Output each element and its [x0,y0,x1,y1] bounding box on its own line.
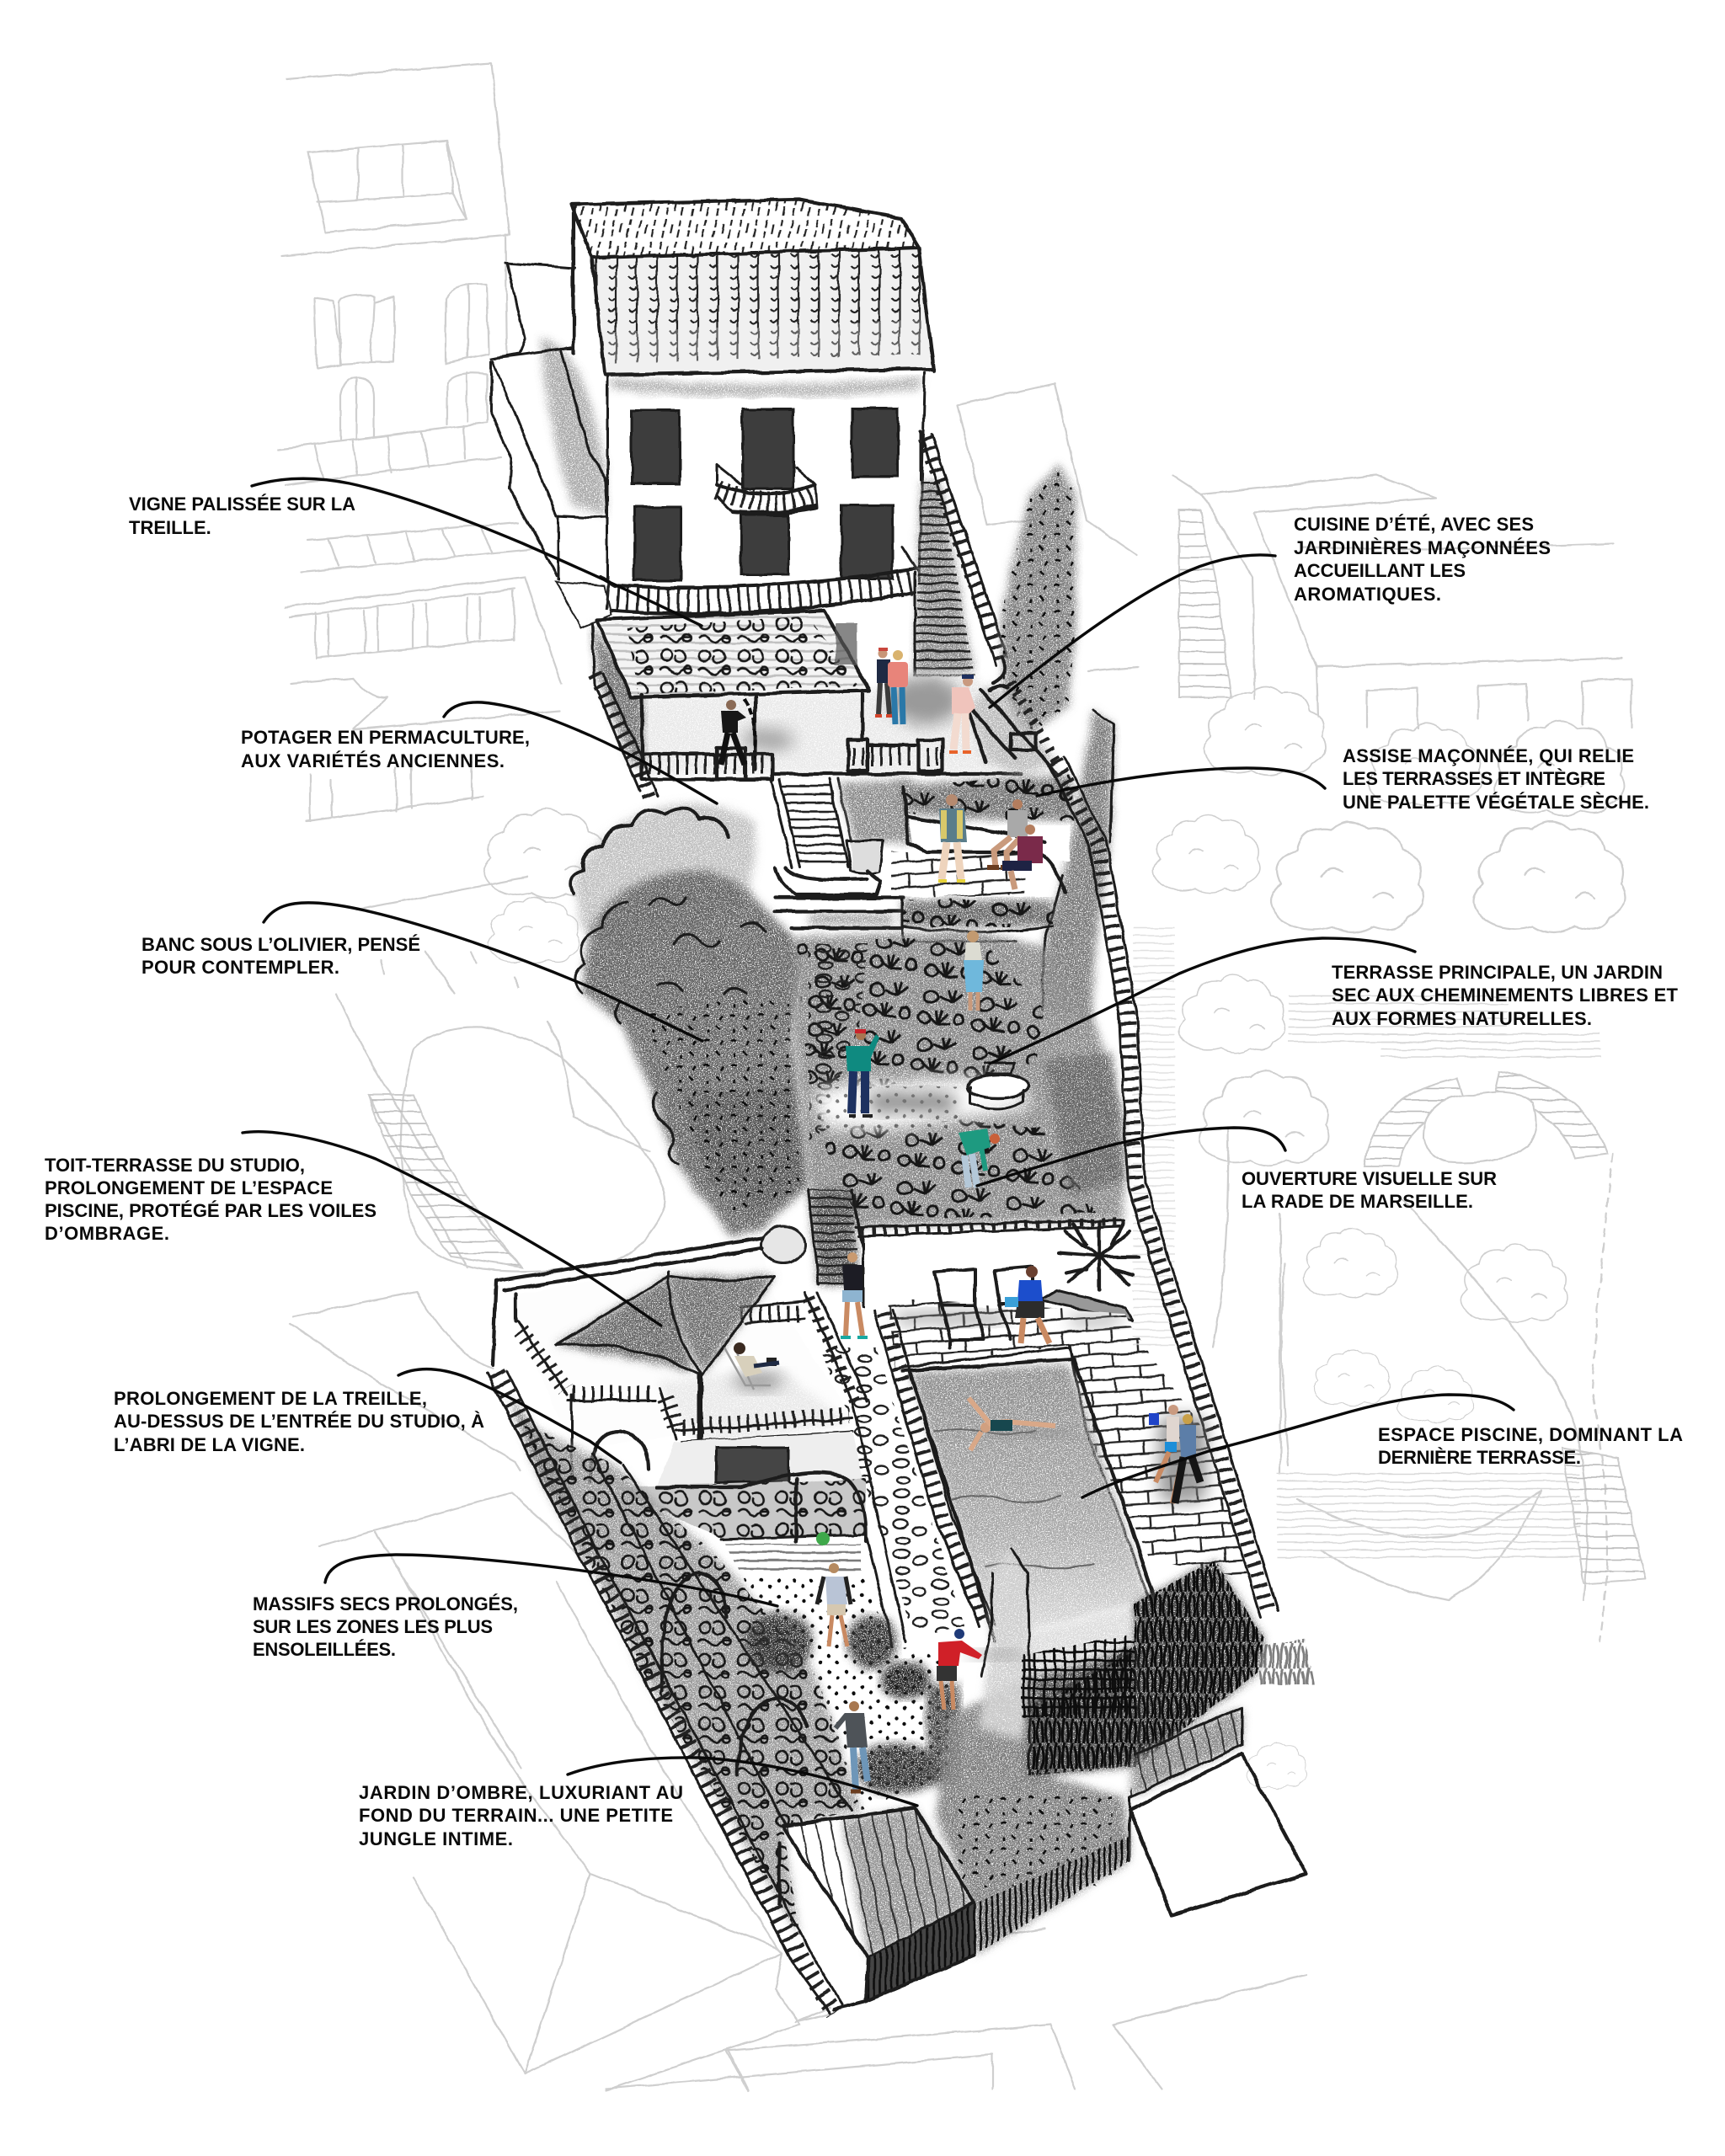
studio front and window [508,1396,863,1565]
people: couple on the pool deck [1149,1405,1207,1503]
callout: massifs secs: SUR LES ZONES LES PLUS [253,1616,493,1637]
house roof [571,200,934,375]
swimming pool [903,1359,1156,1676]
people: woman with camera and shorts [841,1252,868,1337]
callout: ouverture visuelle: LA RADE DE MARSEILLE. [1242,1191,1473,1212]
callout: massifs secs [253,1555,777,1660]
sun loungers [934,1267,1033,1348]
small cypress near pool [979,1548,1030,1741]
upper left building [278,63,562,910]
callout: ouverture visuelle: OUVERTURE VISUELLE SUR [1242,1168,1497,1189]
callout: assise maçonnée: LES TERRASSES ET INTÈGRE [1343,768,1605,789]
people: man in black under pergola [721,700,746,765]
ornamental grasses [1022,1561,1314,1775]
callout: espace piscine [1082,1395,1683,1497]
callout: prolongement de la treille: AU-DESSUS DE L’ENTRÉE DU STUDIO, À [114,1411,484,1432]
curved steps and planter [775,867,1053,942]
callout: toit-terrasse: PISCINE, PROTÉGÉ PAR LES VOILES [45,1200,377,1221]
callout: assise maçonnée [1037,745,1649,813]
main site white base [491,200,1272,2013]
lower right enclosure [1130,1754,1306,1915]
masonry seat and planter [900,775,1074,893]
paved terrace [891,851,1028,898]
callout: cuisine d'été: AROMATIQUES. [1294,584,1441,605]
callout: vigne palissée: TREILLE. [129,517,211,538]
people: person with laptop on deck chair [724,1342,783,1390]
callout: terrasse principale: SEC AUX CHEMINEMENTS LIBRES ET [1332,985,1679,1006]
callout: prolongement de la treille: PROLONGEMENT DE LA TREILLE, [114,1388,427,1409]
callout: espace piscine: ESPACE PISCINE, DOMINANT LA [1378,1424,1683,1445]
people: person bending in green [959,1129,1000,1187]
callout: prolongement de la treille [114,1369,621,1463]
shed roof [779,1807,974,1958]
people: swimmer [969,1398,1070,1450]
callout: jardin d'ombre: FOND DU TERRAIN... UNE PETITE [359,1805,673,1826]
pool deck [887,1298,1247,1600]
people: man in red [937,1629,1019,1710]
studio railings [517,1301,852,1478]
cypress tree [1001,465,1076,740]
main balcony railing [556,547,919,627]
left side trees and pond [337,808,665,1272]
people: woman in pink [888,650,908,724]
callout: terrasse principale: TERRASSE PRINCIPALE, UN JARDIN [1332,962,1663,983]
context arch path [1365,1071,1607,1166]
people: man cooking in pink shirt [949,675,975,752]
stairs to pool terrace [761,1190,866,1284]
callout: massifs secs: MASSIFS SECS PROLONGÉS, [253,1593,518,1614]
shrubs in courtyard [745,1612,960,1794]
terrace railings [642,739,1022,779]
callout: jardin d'ombre: JARDIN D’OMBRE, LUXURIANT AU [359,1782,683,1803]
callout: toit-terrasse [45,1132,661,1326]
exterior staircase [915,430,1007,675]
callout: potager: AUX VARIÉTÉS ANCIENNES. [241,750,505,771]
callout: potager [241,702,717,803]
house facade [607,372,925,581]
second cypress tree [1042,710,1114,1022]
callout: banc sous l'olivier: BANC SOUS L’OLIVIER, PENSÉ [142,934,420,955]
people: boy with green ball [816,1532,851,1646]
palm plant [1040,1221,1140,1321]
upper terrace ground [592,624,1056,800]
callout: prolongement de la treille: L’ABRI DE LA VIGNE. [114,1434,305,1455]
callout: cuisine d'été: ACCUEILLANT LES [1294,560,1466,581]
shade sails [556,1272,775,1439]
summer kitchen [966,657,1057,775]
lower garden wall [974,1707,1242,1956]
paved path and pool wall [805,1293,996,1642]
lawn and gravel courtyard [721,1534,958,1810]
lower staircase from upper terrace [771,779,857,867]
callout: toit-terrasse: PROLONGEMENT DE L’ESPACE [45,1177,333,1198]
outer left wall [487,1371,842,2013]
callout: vigne palissée: VIGNE PALISSÉE SUR LA [129,494,355,515]
context water hatching lower right [1277,994,1646,1583]
small balcony [717,465,817,515]
callout: potager: POTAGER EN PERMACULTURE, [241,727,530,748]
windows [632,408,898,580]
callout: vigne palissée [129,478,702,626]
left annex of the house [491,263,607,579]
main dry garden [793,931,1124,1227]
right side trees [1153,686,1626,1788]
people: bearded man in sweater [836,1701,868,1791]
road band left [368,1095,522,1267]
callout: banc sous l'olivier: POUR CONTEMPLER. [142,957,339,978]
callout: banc sous l'olivier [142,903,702,1041]
callout: jardin d'ombre: JUNGLE INTIME. [359,1828,513,1849]
pot and shrub beside stairs [839,779,927,873]
callout: cuisine d'été: CUISINE D’ÉTÉ, AVEC SES [1294,514,1534,535]
shade garden [915,1676,1130,1908]
people: woman seated in blue top [1005,1266,1049,1343]
callout: massifs secs: ENSOLEILLÉES. [253,1639,396,1660]
outer right wall [1049,758,1278,1617]
upper right buildings [958,383,1632,728]
studio roof terrace [493,1238,851,1449]
callout: cuisine d'été: JARDINIÈRES MAÇONNÉES [1294,537,1551,558]
people: man in teal with red cap [846,1029,879,1116]
upper shrub [570,803,756,952]
people: woman in blue skirt with hat [964,931,984,1011]
callout: assise maçonnée: ASSISE MAÇONNÉE, QUI RELIE [1343,745,1634,766]
callout: jardin d'ombre [359,1758,917,1849]
shed dark wall [834,1904,974,2009]
callout: assise maçonnée: UNE PALETTE VÉGÉTALE SÈCHE. [1343,792,1649,813]
callout: terrasse principale [990,938,1679,1064]
context stairs right [1179,510,1231,697]
callout: toit-terrasse: D’OMBRAGE. [45,1223,169,1244]
left planted beds [522,1423,861,1937]
lower left parcels [290,1292,1306,2091]
wall above pool deck [857,1220,1124,1314]
pergola with vine [596,611,869,770]
people: navy man with red cap [875,648,893,716]
callout: espace piscine: DERNIÈRE TERRASSE. [1378,1447,1581,1468]
callout: toit-terrasse: TOIT-TERRASSE DU STUDIO, [45,1155,305,1176]
olive tree [575,871,809,1237]
people: seated group on masonry bench [938,794,1043,889]
background context drawing: neighbouring buildings, trees and streets [278,63,1646,2091]
callout: cuisine d'été [990,514,1551,707]
callout: terrasse principale: AUX FORMES NATURELLES. [1332,1008,1592,1029]
lower trellis [590,1432,866,1541]
garden path and table [814,1063,1032,1129]
callout: ouverture visuelle [977,1128,1497,1212]
